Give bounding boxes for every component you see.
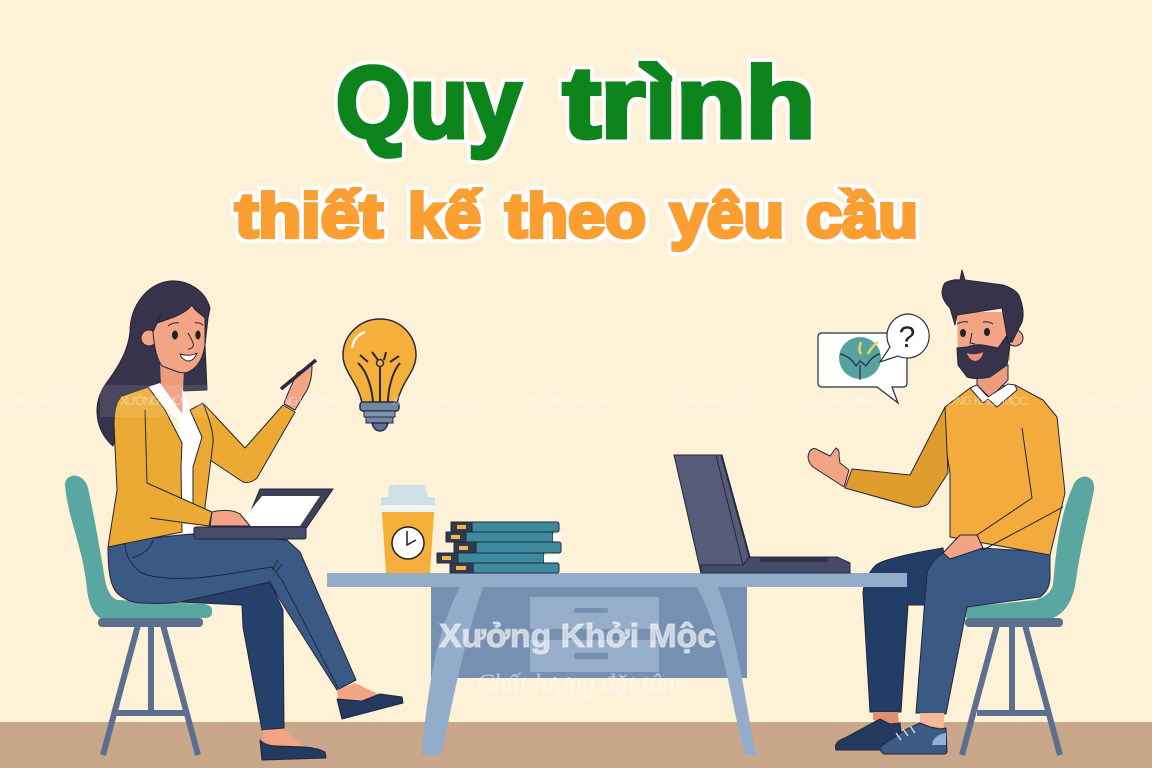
subtitle: kế (408, 182, 482, 251)
subtitle: cầu (806, 182, 918, 251)
sweater arm lines (977, 428, 1063, 550)
fringe line (155, 313, 162, 325)
watermark strip: XƯỞNG KHỞI MỘC (120, 393, 210, 408)
rear foot and shoe (835, 712, 902, 750)
extended hand (808, 448, 849, 487)
coffee cup (381, 485, 435, 573)
desk (327, 573, 907, 755)
hair (97, 281, 210, 446)
watermark strip: XƯỞNG KHỞI MỘC (930, 393, 1028, 408)
book stack (437, 522, 562, 573)
title: Quy (336, 47, 521, 159)
laptop (674, 455, 850, 573)
subtitle: yêu (670, 182, 784, 251)
ear (141, 330, 157, 346)
woman (97, 281, 403, 760)
hand on tablet (210, 510, 250, 526)
front foot and shoe (337, 683, 403, 719)
watermark strip: XƯỞNG KHỞI MỘC (660, 393, 755, 408)
front leg (108, 534, 356, 690)
eyes (957, 322, 993, 344)
question bubble: ? (899, 321, 915, 354)
mouth (967, 352, 983, 361)
beard (957, 335, 1010, 378)
neck (160, 360, 184, 415)
desk top (327, 573, 907, 587)
light bulb (343, 319, 416, 431)
watermark strip: XƯỞNG KHỞI MỘC (795, 393, 885, 408)
watermark strip: XƯỞNG KHỞI MỘC (392, 393, 484, 408)
floor (0, 722, 1152, 768)
extended arm (845, 407, 948, 507)
sleeve (118, 410, 212, 526)
shirt (148, 383, 202, 533)
title: trình (563, 47, 815, 159)
subtitle: theo (505, 182, 646, 251)
trouser seams (125, 540, 338, 688)
globe icon (839, 337, 881, 380)
rear leg (863, 548, 950, 712)
watermark strip: XƯỞNG KHỞI MỘC (258, 393, 350, 408)
subtitle: thiết (235, 182, 383, 251)
hair (942, 270, 1023, 342)
rear foot and shoe (260, 729, 326, 760)
speech bubble with chart (818, 314, 929, 403)
title (336, 47, 815, 159)
raised hand and pen (281, 360, 316, 410)
desk legs (421, 587, 756, 755)
ear (1007, 330, 1023, 346)
watermark strip: XƯỞNG KHỞI MỘC (527, 393, 622, 408)
front foot and shoe (880, 713, 947, 754)
brand watermark: Xưởng Khởi Mộc (439, 617, 716, 654)
rear leg (180, 582, 284, 730)
sweater (943, 385, 1065, 555)
collar (970, 384, 1017, 407)
front leg (916, 548, 1050, 714)
face (957, 312, 1010, 375)
neck (977, 365, 1008, 398)
eyes and smile (168, 323, 203, 361)
man (808, 270, 1065, 754)
watermark strip (0, 385, 1152, 417)
hand on knee (943, 535, 983, 559)
brand tagline: Chất lượng đặt tâm (476, 669, 681, 698)
clock (392, 527, 424, 559)
right chair (962, 477, 1094, 755)
left chair (65, 476, 212, 755)
raised arm (203, 403, 295, 482)
tablet (194, 489, 333, 539)
subtitle (235, 182, 918, 251)
jacket (108, 387, 182, 547)
drawer panel (530, 597, 659, 672)
face (153, 305, 205, 373)
